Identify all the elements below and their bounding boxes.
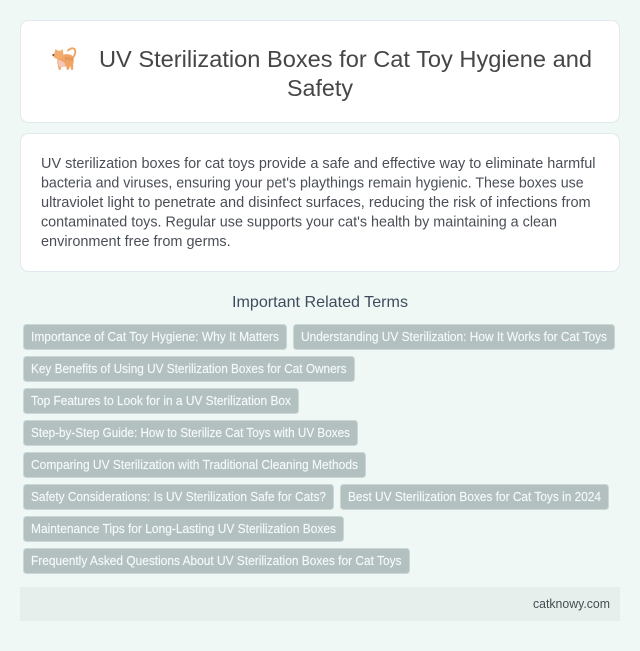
- panel: title card: [20, 20, 620, 122]
- description text: bacteria and viruses, ensuring your pet's playthings remain hygienic. These boxes use: [41, 174, 584, 192]
- title: Safety: [287, 75, 353, 101]
- title: UV Sterilization Boxes for Cat Toy Hygiene and: [99, 46, 592, 72]
- panel: description: [20, 134, 620, 272]
- tag: top features: Top Features to Look for in a UV Sterilization Box: [31, 394, 292, 408]
- tag: understanding UV: Understanding UV Sterilization: How It Works for Cat Toys: [301, 330, 607, 344]
- tag: safety considerations: [24, 484, 334, 510]
- tag: cat toy hygiene: [24, 324, 286, 350]
- description text: UV sterilization boxes for cat toys provide a safe and effective way to eliminate harmful: [41, 155, 596, 172]
- tag: comparing methods: [24, 452, 366, 478]
- icon: cat: [52, 48, 75, 70]
- description text: [41, 155, 596, 250]
- tag: cat toy hygiene: Importance of Cat Toy Hygiene: Why It Matters: [31, 330, 279, 344]
- tag: key benefits: [24, 356, 354, 382]
- description text: environment free from germs.: [41, 233, 231, 250]
- tag: FAQ: [24, 548, 410, 574]
- tag: maintenance tips: [24, 516, 344, 542]
- heading: important related terms: Important Related Terms: [232, 294, 408, 311]
- tag: understanding UV: [294, 324, 614, 350]
- tag: step-by-step guide: [24, 420, 358, 446]
- tag: FAQ: Frequently Asked Questions About UV Sterilization Boxes for Cat Toys: [31, 554, 402, 568]
- description text: ultraviolet light to penetrate and disinfect surfaces, reducing the risk of infections from: [41, 194, 591, 211]
- tag: comparing methods: Comparing UV Sterilization with Traditional Cleaning Methods: [31, 458, 358, 472]
- tag: step-by-step guide: Step-by-Step Guide: How to Sterilize Cat Toys with UV Boxes: [31, 426, 350, 440]
- tag: safety considerations: Safety Considerations: Is UV Sterilization Safe for Cats?: [31, 490, 326, 504]
- related terms tags: [24, 324, 614, 574]
- tag: key benefits: Key Benefits of Using UV Sterilization Boxes for Cat Owners: [31, 362, 346, 376]
- description text: contaminated toys. Regular use supports your cat's health by maintaining a clean: [41, 214, 557, 230]
- footer domain: catknowy.com: [533, 596, 610, 611]
- title: [99, 46, 592, 101]
- tag: best boxes 2024: Best UV Sterilization Boxes for Cat Toys in 2024: [348, 490, 601, 504]
- footer: [20, 587, 620, 621]
- tag: top features: [24, 388, 298, 414]
- tag: best boxes 2024: [340, 484, 608, 510]
- tag: maintenance tips: Maintenance Tips for Long-Lasting UV Sterilization Boxes: [31, 522, 336, 536]
